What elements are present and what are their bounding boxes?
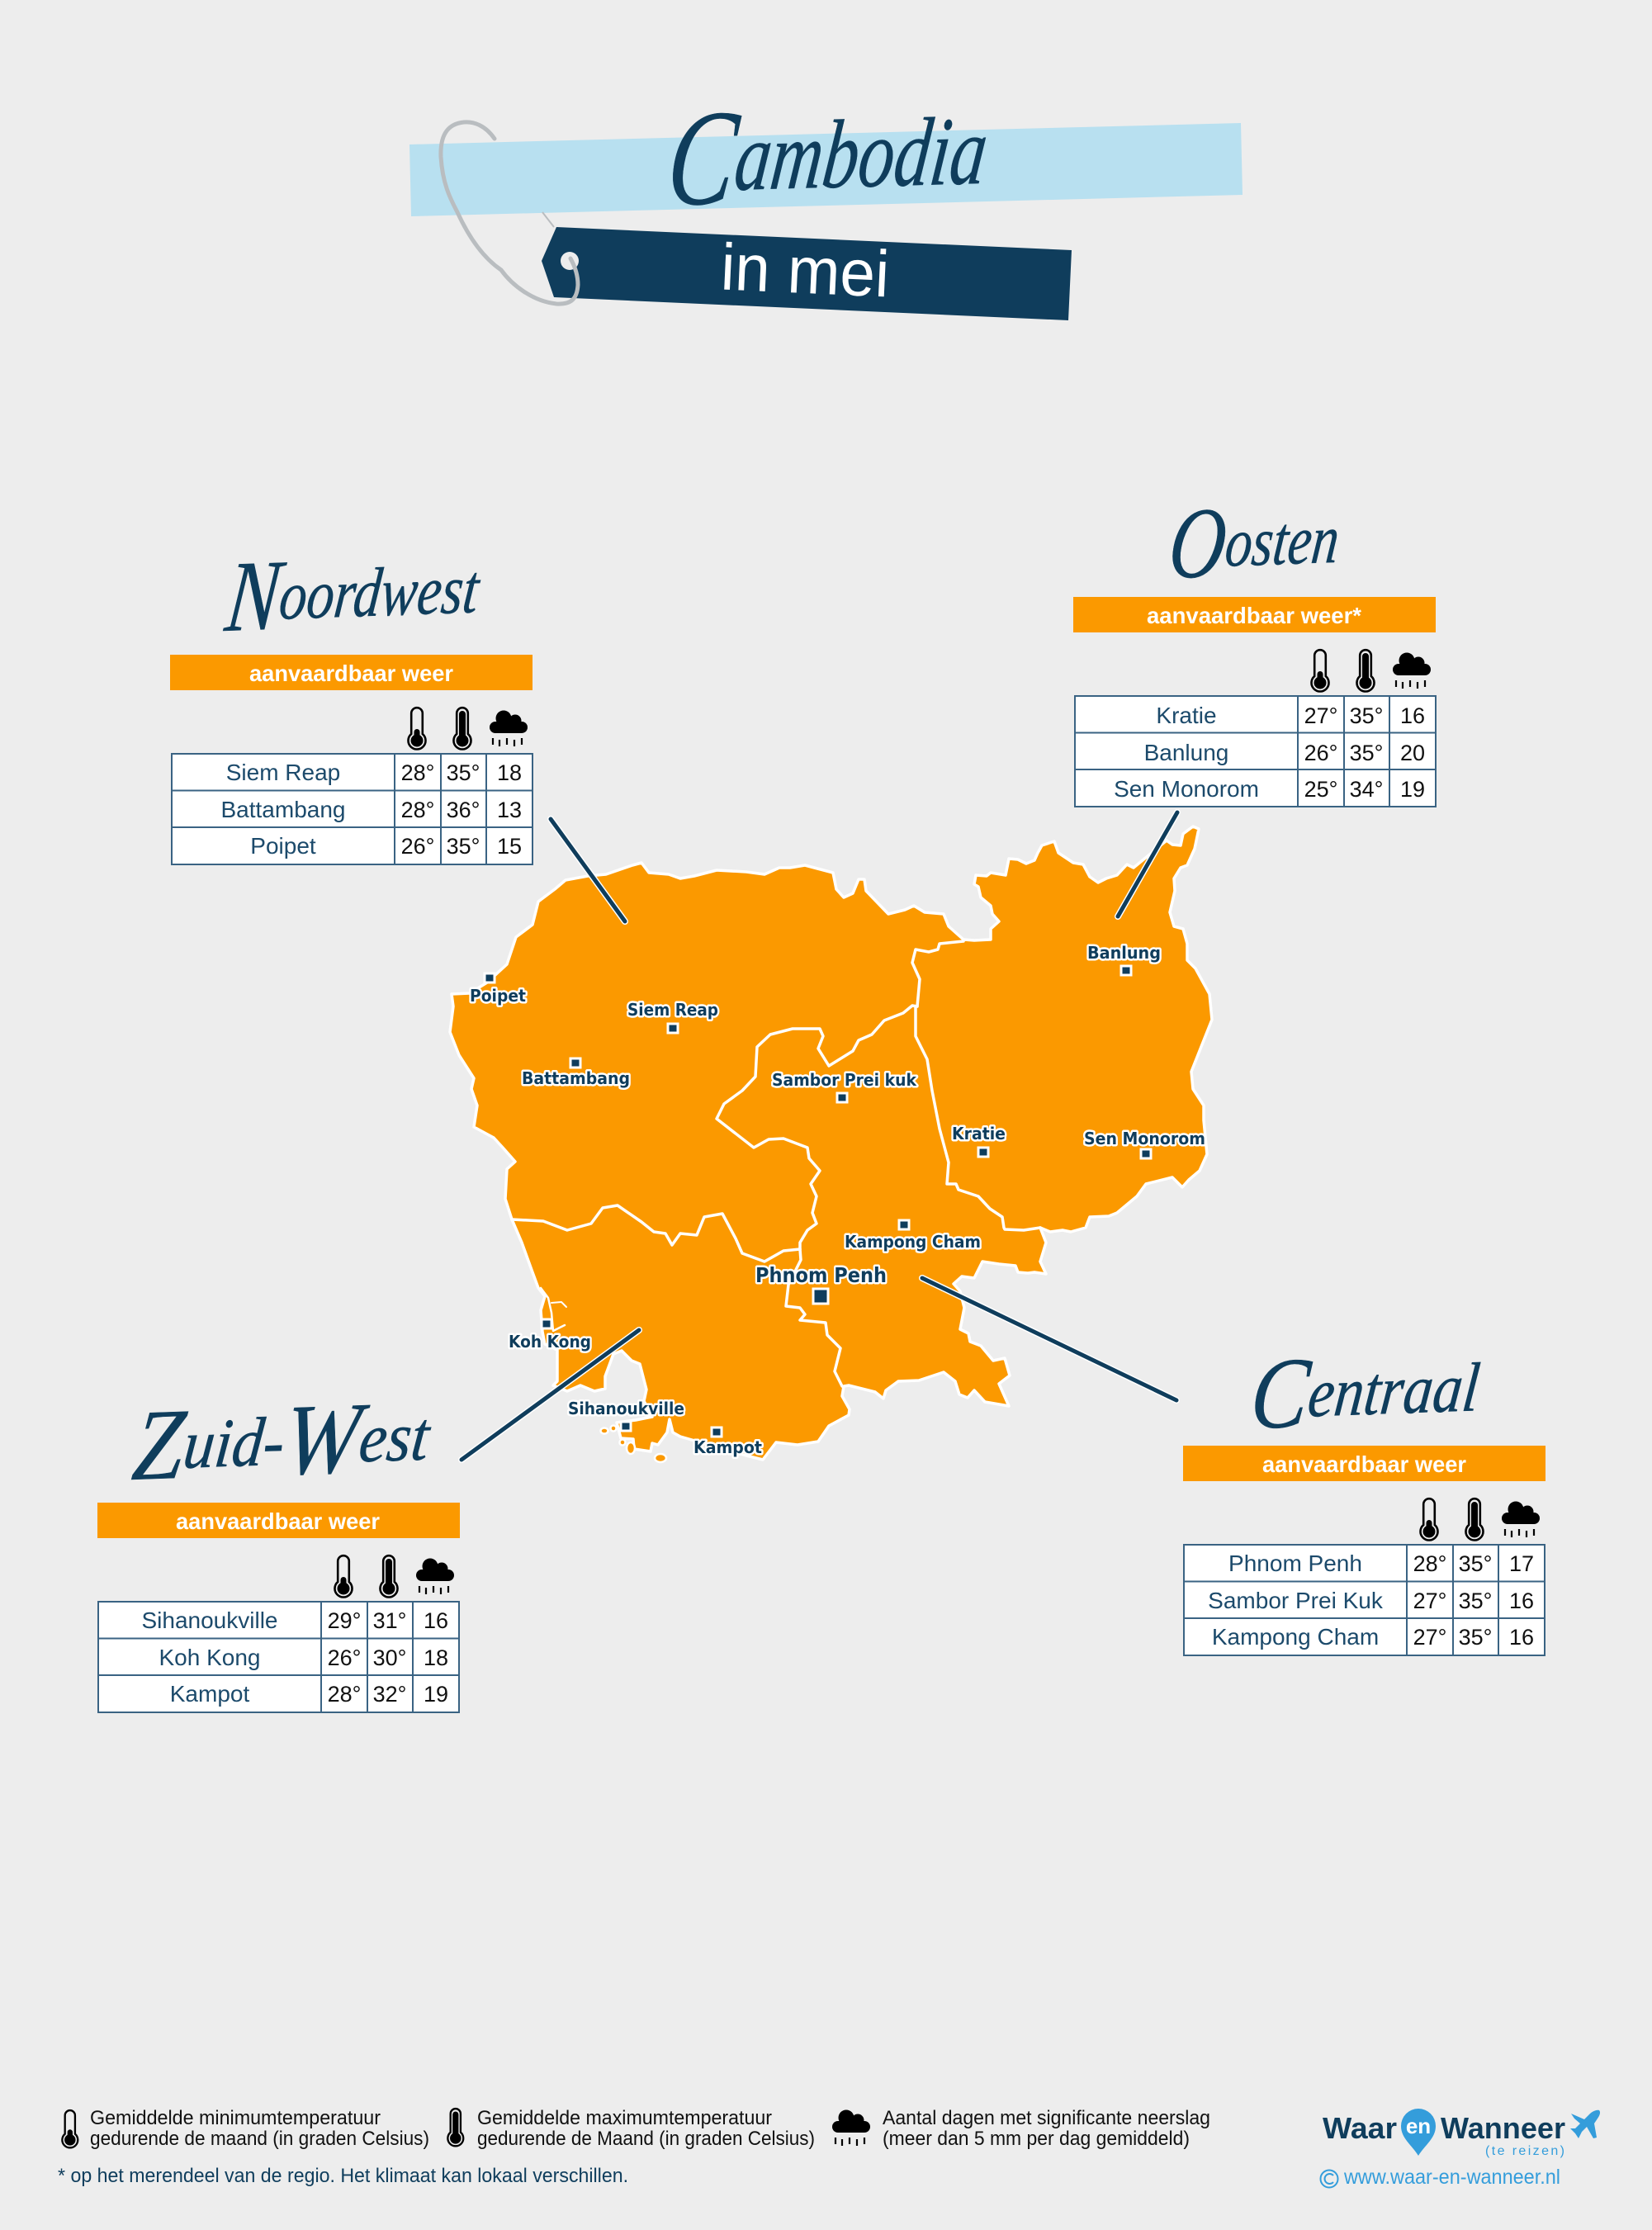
climate table: Siem Reap (226, 760, 340, 785)
climate table: Kampong Cham (1212, 1624, 1379, 1650)
title: Cambodia: ambodia (730, 96, 993, 211)
city labels: Kratie (952, 1124, 1006, 1143)
heading: Centraal: entraal (1304, 1349, 1484, 1432)
climate table: Battambang (221, 797, 345, 822)
heading: Zuid-West: uid- (180, 1404, 288, 1484)
climate table: 32° (373, 1682, 406, 1707)
city labels: Battambang (522, 1068, 630, 1088)
icon: max temperature (454, 708, 471, 750)
climate table: 28° (1413, 1551, 1446, 1576)
logo text: en: en (1406, 2114, 1431, 2138)
heading: Zuid-West: Z (128, 1388, 192, 1502)
panel: Oosten (1073, 482, 1436, 807)
city labels (470, 943, 1205, 1457)
legend text: max temperature: Gemiddelde maximumtemperatuur (477, 2107, 772, 2129)
icon: max temperature (1357, 650, 1374, 692)
climate table: 31° (373, 1608, 406, 1633)
legend text: rain: (meer dan 5 mm per dag gemiddeld) (883, 2128, 1190, 2150)
city labels: Siem Reap (627, 1000, 718, 1020)
climate table: 16 (1509, 1625, 1534, 1650)
city labels: Sihanoukville (568, 1399, 684, 1418)
icon: min temperature (408, 708, 426, 750)
city labels: Phnom Penh (755, 1263, 887, 1287)
city labels: Kampong Cham (845, 1232, 981, 1252)
climate table: 19 (1400, 777, 1425, 802)
status text: aanvaardbaar weer (1262, 1451, 1466, 1477)
map of Cambodia (450, 812, 1212, 1462)
climate table: 13 (497, 798, 522, 822)
icon: min temperature (1420, 1499, 1438, 1541)
climate table: 36° (447, 798, 480, 822)
climate table: 27° (1413, 1625, 1446, 1650)
legend text: rain: Aantal dagen met significante neerslag (883, 2107, 1210, 2129)
climate table: 34° (1350, 777, 1383, 802)
heading: Oosten: O (1164, 486, 1232, 600)
status text: aanvaardbaar weer (249, 660, 453, 686)
panel: Centraal (1183, 1330, 1545, 1655)
legend text: min temperature: gedurende de maand (in graden Celsius) (90, 2128, 429, 2150)
city labels: Sen Monorom (1084, 1129, 1205, 1148)
icon: max temperature (1466, 1499, 1483, 1541)
website: www.waar-en-wanneer.nl (1343, 2166, 1560, 2189)
heading: Zuid-West: est (356, 1398, 435, 1477)
tag ring (441, 122, 578, 304)
status bar (1183, 1446, 1545, 1481)
climate table: 35° (1350, 703, 1383, 728)
climate table: 18 (424, 1645, 448, 1670)
icon: airplane (1570, 2110, 1600, 2138)
heading: Noordwest: N (220, 539, 290, 653)
title block (409, 74, 1243, 320)
climate table: 16 (1509, 1588, 1534, 1613)
city markers (485, 966, 1151, 1437)
climate table (98, 1602, 459, 1712)
legend text: min temperature: Gemiddelde minimumtemperatuur (90, 2107, 381, 2129)
icon: rain (490, 710, 528, 746)
icon: copyright (1321, 2170, 1337, 2188)
icon: map pin (1401, 2109, 1436, 2156)
tag hole (561, 252, 579, 270)
subtitle tag (542, 227, 1072, 320)
climate table: 35° (1350, 741, 1383, 765)
leader line: Centraal (922, 1278, 1176, 1400)
icon: min temperature (1311, 650, 1329, 692)
climate table: Koh Kong (159, 1645, 261, 1670)
heading: Oosten: osten (1222, 501, 1343, 582)
islands (601, 1425, 666, 1462)
legend text: max temperature: gedurende de Maand (in graden Celsius) (477, 2128, 815, 2150)
city labels: Banlung (1087, 943, 1161, 963)
climate table: 15 (497, 834, 522, 859)
climate table: 35° (1459, 1551, 1492, 1576)
legend (58, 2107, 1210, 2187)
logo: Waar en Wanneer (1321, 2109, 1600, 2189)
climate table: 20 (1400, 741, 1425, 765)
climate table: 35° (447, 834, 480, 859)
climate table: 35° (1459, 1625, 1492, 1650)
icon: rain (416, 1559, 454, 1594)
climate table: 28° (401, 798, 434, 822)
status bar (170, 655, 533, 690)
icon: legend max temperature (447, 2109, 463, 2146)
climate table: 16 (1400, 703, 1425, 728)
climate table: Phnom Penh (1228, 1551, 1362, 1576)
subtitle: in mei: in mei (719, 230, 891, 311)
status bar (97, 1503, 460, 1538)
climate table: 16 (424, 1608, 448, 1633)
climate table: 28° (328, 1682, 361, 1707)
climate table: 26° (328, 1645, 361, 1670)
climate table: 35° (1459, 1588, 1492, 1613)
climate table: 25° (1304, 777, 1337, 802)
status bar (1073, 597, 1436, 632)
logo text: Waar: Waar (1323, 2111, 1397, 2145)
climate table: 35° (447, 760, 480, 785)
region borders (512, 941, 1040, 1386)
climate table: Kratie (1156, 703, 1217, 728)
heading: Noordwest: oordwest (276, 551, 485, 635)
icon: min temperature (335, 1555, 352, 1598)
title band (409, 123, 1243, 216)
climate table: 27° (1304, 703, 1337, 728)
climate table: 29° (328, 1608, 361, 1633)
leader line: Noordwest (551, 819, 625, 921)
climate table: Sambor Prei Kuk (1208, 1588, 1384, 1613)
climate table (172, 754, 533, 864)
climate table: Sihanoukville (142, 1607, 277, 1633)
leader line: Oosten (1118, 812, 1177, 916)
city labels: Koh Kong (509, 1332, 591, 1352)
heading: Zuid-West: W (278, 1381, 373, 1497)
climate table: 19 (424, 1682, 448, 1707)
logo text: Wanneer: Wanneer (1441, 2111, 1565, 2145)
climate table: Sen Monorom (1114, 776, 1259, 802)
icon: max temperature (380, 1555, 398, 1598)
climate table: Kampot (170, 1681, 249, 1707)
footnote: * op het merendeel van de regio. Het klimaat kan lokaal verschillen. (58, 2165, 628, 2187)
climate table: 26° (1304, 741, 1337, 765)
icon: legend min temperature (62, 2110, 78, 2147)
tag string behind (542, 212, 554, 227)
climate table: 18 (497, 760, 522, 785)
icon: rain (1393, 652, 1431, 689)
logo tagline: (te reizen) (1485, 2144, 1564, 2158)
country shape (450, 826, 1212, 1460)
city labels: Kampot (693, 1437, 762, 1457)
status text: aanvaardbaar weer (176, 1508, 380, 1534)
city labels: Poipet (470, 986, 526, 1006)
icon: rain (1502, 1501, 1540, 1537)
panel: Noordwest (170, 532, 533, 864)
climate table: 17 (1509, 1551, 1534, 1576)
climate table (1075, 696, 1436, 807)
climate table: Poipet (250, 833, 316, 859)
climate table: 30° (373, 1645, 406, 1670)
leader line: Zuid-West (462, 1330, 639, 1460)
climate table (1184, 1545, 1545, 1655)
icon: legend rain (832, 2110, 870, 2146)
city labels: Sambor Prei kuk (772, 1070, 917, 1090)
panel: Zuid-West (97, 1380, 460, 1712)
heading: Centraal: C (1246, 1337, 1315, 1451)
climate table: 28° (401, 760, 434, 785)
title: Cambodia: C (660, 81, 746, 234)
status text: aanvaardbaar weer* (1147, 603, 1361, 628)
climate table: 26° (401, 834, 434, 859)
climate table: Banlung (1144, 740, 1228, 765)
climate table: 27° (1413, 1588, 1446, 1613)
